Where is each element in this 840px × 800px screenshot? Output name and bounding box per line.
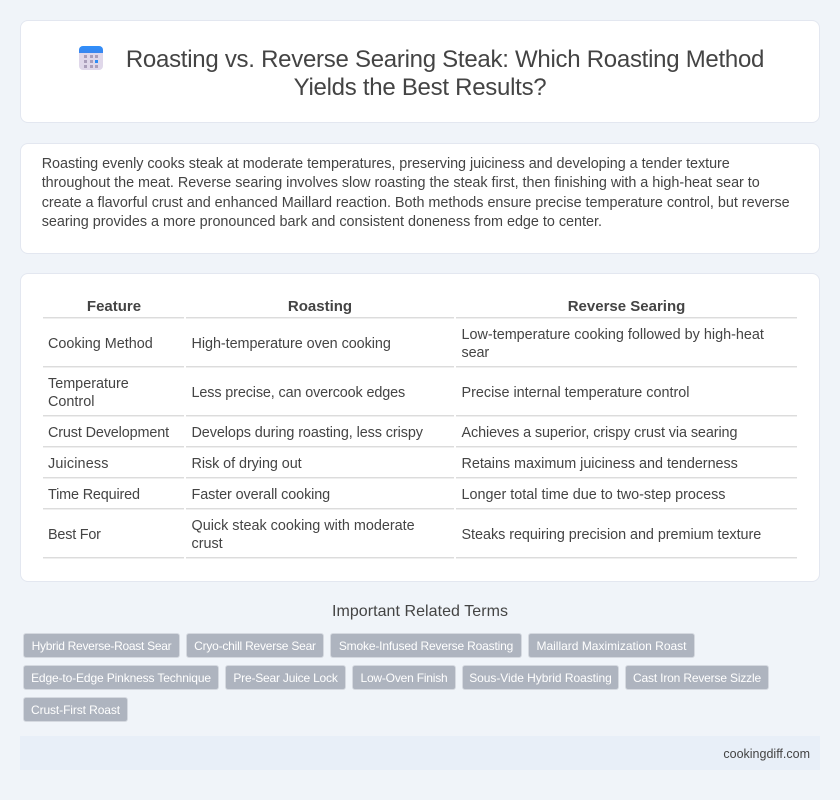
table header: Reverse Searing <box>568 298 685 315</box>
row: temperature control: Precise internal temperature control <box>462 385 689 401</box>
row: temperature control <box>48 376 689 410</box>
row: best for: crust <box>192 536 223 552</box>
row: cooking method: sear <box>462 345 489 361</box>
row: time required: Longer total time due to two-step process <box>462 487 725 503</box>
heading: related terms: Important Related Terms <box>332 603 508 620</box>
related term tags: Cryo-chill Reverse Sear <box>194 639 316 653</box>
related term tags: Edge-to-Edge Pinkness Technique <box>31 671 211 685</box>
row: best for: Best For <box>48 527 101 543</box>
related term tags: Sous-Vide Hybrid Roasting <box>469 671 612 685</box>
icon: calendar <box>79 46 103 70</box>
row: time required: Time Required <box>48 487 140 503</box>
table header: Feature <box>87 298 141 315</box>
row: cooking method <box>48 327 764 361</box>
row: crust development: Achieves a superior, crispy crust via searing <box>462 425 737 441</box>
related term tags: Smoke-Infused Reverse Roasting <box>339 639 513 653</box>
source credit: cookingdiff.com <box>723 746 810 760</box>
related term tags <box>23 633 769 722</box>
row: cooking method: Low-temperature cooking followed by high-heat <box>462 327 764 343</box>
intro paragraph: Roasting evenly cooks steak at moderate temperatures, preserving juiciness and developing a tender texture <box>42 156 730 172</box>
title: Roasting vs. Reverse Searing Steak: Which Roasting Method <box>126 46 764 73</box>
title: Yields the Best Results? <box>294 74 546 101</box>
panel: comparison table <box>20 273 820 582</box>
row: best for: Quick steak cooking with moderate <box>192 518 415 534</box>
row: crust development <box>48 425 737 441</box>
row: time required: Faster overall cooking <box>192 487 330 503</box>
row: temperature control: Temperature <box>48 376 129 392</box>
row: juiciness: Retains maximum juiciness and tenderness <box>462 456 738 472</box>
row: cooking method: High-temperature oven cooking <box>192 336 391 352</box>
row: crust development: Crust Development <box>48 425 169 441</box>
related term tags: Cast Iron Reverse Sizzle <box>633 671 761 685</box>
table header <box>87 298 685 315</box>
related term tags: Low-Oven Finish <box>360 671 448 685</box>
panel: intro text <box>20 143 820 254</box>
related term tags: Pre-Sear Juice Lock <box>233 671 338 685</box>
table header: Roasting <box>288 298 352 315</box>
intro paragraph: searing provides a more pronounced bark and consistent doneness from edge to center. <box>42 214 602 230</box>
row: juiciness: Juiciness <box>48 456 109 472</box>
row: juiciness: Risk of drying out <box>192 456 302 472</box>
row: cooking method: Cooking Method <box>48 336 153 352</box>
related term tags: Maillard Maximization Roast <box>536 639 687 653</box>
row: crust development: Develops during roasting, less crispy <box>192 425 423 441</box>
row: time required <box>48 487 725 503</box>
panel: header <box>20 20 820 123</box>
row: best for: Steaks requiring precision and premium texture <box>462 527 761 543</box>
footer <box>20 736 820 770</box>
row: juiciness <box>48 456 738 472</box>
intro paragraph <box>42 156 790 230</box>
intro paragraph: throughout the meat. Reverse searing involves slow roasting the steak first, then finishing with a high-heat sear to <box>42 175 760 191</box>
row: temperature control: Less precise, can overcook edges <box>192 385 405 401</box>
row: best for <box>48 518 761 552</box>
row: temperature control: Control <box>48 394 94 410</box>
intro paragraph: create a flavorful crust and enhanced Maillard reaction. Both methods ensure precise temperature control, but reverse <box>42 195 790 211</box>
related term tags: Hybrid Reverse-Roast Sear <box>32 639 171 653</box>
title <box>126 46 764 101</box>
related term tags: Crust-First Roast <box>31 703 120 717</box>
